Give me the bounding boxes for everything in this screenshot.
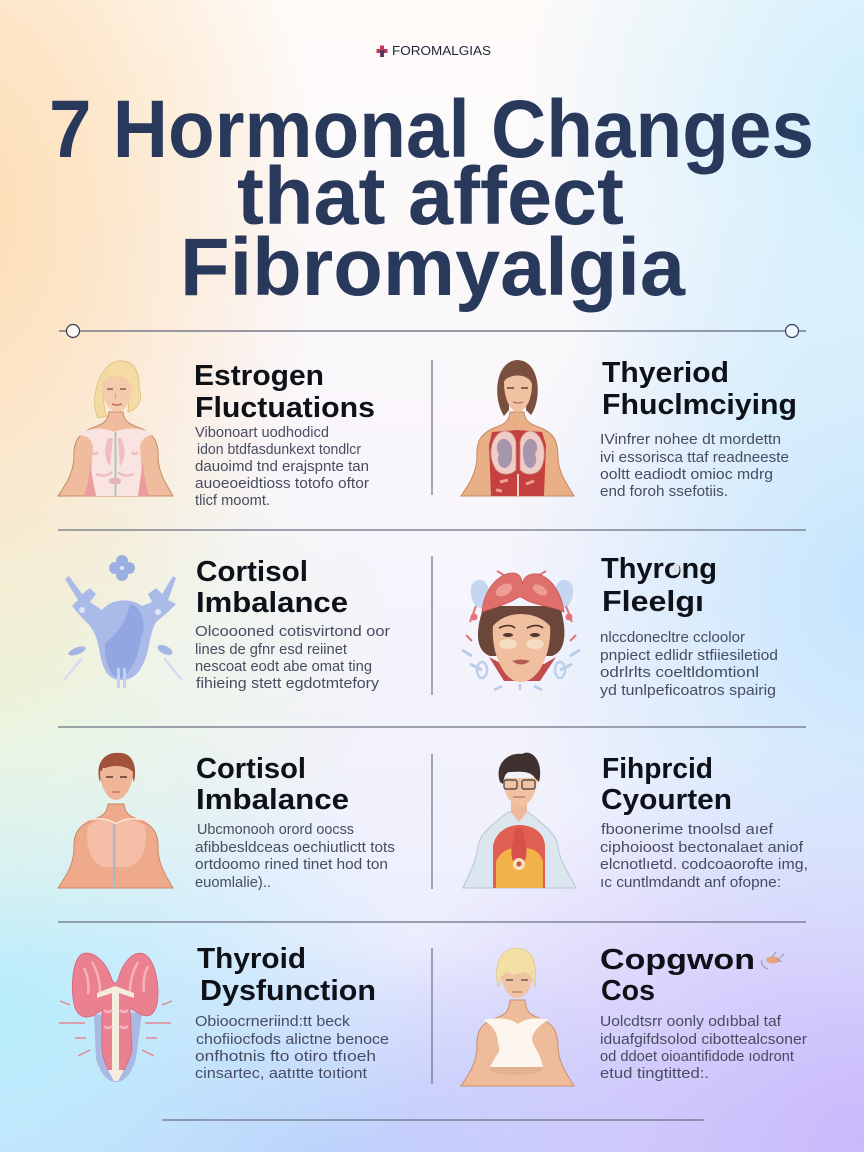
icon: thyroid anatomy: [59, 953, 172, 1082]
body text: idon btdfasdunkext tondlcr: [197, 442, 361, 458]
panel: estrogen fluctuations: [58, 360, 375, 509]
body text: lines de gfnr esd reiinet: [195, 642, 347, 658]
body text: ciphoioost bectonalaet aniof: [600, 840, 804, 856]
body text: [600, 1014, 807, 1082]
body text: auoeoeidtioss totofo oftor: [195, 476, 369, 492]
heading: Fleelgı: [602, 586, 704, 618]
body text: end foroh ssefotiis.: [600, 484, 728, 500]
heading: Thyeriod: [602, 357, 729, 389]
brand label: FOROMALGIAS: [392, 44, 491, 58]
body text: ivi essorisca ttaf readneeste: [600, 450, 789, 466]
heading: [602, 357, 797, 421]
heading: Imbalance: [196, 784, 349, 816]
panel: copgwon cos: [461, 944, 807, 1086]
heading: [601, 553, 717, 618]
heading: [601, 753, 732, 816]
heading: Cortisol: [196, 556, 308, 588]
body text: [195, 822, 395, 891]
body text: od ddoet oioantifidode ıodront: [600, 1049, 794, 1065]
heading: Dysfunction: [200, 975, 376, 1007]
panel: fihprcid cyourten: [463, 753, 808, 891]
body text: Olcoooned cotisvirtond oor: [195, 624, 390, 640]
icon: blonde person with white chest patch: [461, 948, 574, 1086]
body text: dauoimd tnd erajspnte tan: [195, 459, 369, 475]
body text: [195, 1014, 389, 1082]
heading: [600, 944, 755, 1007]
panel: thyrong fleelgi: [462, 553, 778, 699]
body text: Vibonoart uodhodicd: [195, 425, 329, 441]
heading: Thyroid: [197, 943, 306, 975]
body text: fboonerime tnoolsd aıef: [601, 822, 774, 838]
body text: [195, 425, 369, 509]
body text: nescoat eodt abe omat ting: [195, 659, 372, 675]
title: that affect: [237, 151, 624, 242]
body text: euomlalie)..: [195, 875, 271, 891]
icon: small spider-like glyph: [762, 952, 784, 969]
body text: pnpiect edlidr stfiiesiletiod: [600, 648, 778, 664]
body text: onfhotnis fto otiro tfıoeh: [195, 1049, 376, 1065]
body text: fihieing stett egdotmtefory: [196, 676, 380, 692]
panel: thyeriod fhuclmciying: [461, 357, 797, 500]
body text: tlicf moomt.: [195, 493, 270, 509]
icon: blonde woman torso: [58, 361, 173, 496]
body text: etud tingtitted:.: [600, 1066, 709, 1082]
heading: [196, 556, 348, 619]
body text: odrlrlts coeltldomtionl: [600, 665, 759, 681]
icon: blue gland: [64, 555, 182, 688]
body text: [600, 630, 778, 699]
icon: man with glasses and glowing torso: [463, 753, 576, 888]
heading: Fhuclmciying: [602, 389, 797, 421]
heading: Copgwon: [600, 944, 755, 976]
panel: cortisol imbalance (male): [58, 753, 395, 891]
panel: thyroid dysfunction: [59, 943, 389, 1082]
body text: yd tunlpeficoatros spairig: [600, 683, 776, 699]
body text: nlccdonecltre ccloolor: [600, 630, 745, 646]
body text: Uolcdtsrr oonly odıbbal taf: [600, 1014, 782, 1030]
heading: [194, 360, 375, 424]
body text: afibbesldceas oechiutlictt tots: [195, 840, 395, 856]
heading: [197, 943, 376, 1007]
body text: ıc cuntlmdandt anf ofopne:: [600, 875, 781, 891]
icon: red-haired man torso: [58, 753, 173, 888]
body text: cinsartec, aatıtte toıtiont: [195, 1066, 367, 1082]
body text: Obioocrneriind:tt beck: [195, 1014, 351, 1030]
heading: Thyrong: [601, 553, 717, 585]
heading: Cos: [601, 975, 655, 1007]
heading: Imbalance: [196, 587, 348, 619]
body text: iduafgifdsolod cibottealcsoner: [600, 1032, 807, 1048]
body text: ortdoomo rined tinet hod ton: [195, 857, 388, 873]
body text: [600, 822, 808, 891]
header divider with end dots: [59, 324, 806, 338]
title: Fibromyalgia: [180, 222, 686, 313]
body text: elcnotlıetd. codcoaorofte img,: [600, 857, 808, 873]
body text: IVinfrer nohee dt mordettn: [600, 432, 781, 448]
body text: [195, 624, 390, 692]
heading: Estrogen: [194, 360, 324, 392]
body text: Ubcmonooh orord oocss: [197, 822, 354, 838]
icon: face with brain: [462, 571, 580, 690]
title: 7 Hormonal Changes: [49, 84, 814, 175]
body text: ooltt eadiodt omioc mdrg: [600, 467, 773, 483]
heading: [196, 753, 349, 816]
heading: Cyourten: [601, 784, 732, 816]
body text: chofiiocfods alictne benoce: [196, 1032, 389, 1048]
icon: brunette woman with lungs: [461, 360, 574, 496]
body text: [600, 432, 789, 500]
heading: Fihprcid: [602, 753, 713, 785]
heading: Fluctuations: [195, 392, 375, 424]
heading: Cortisol: [196, 753, 306, 785]
title: [49, 84, 814, 313]
panel: cortisol imbalance (gland): [64, 555, 390, 692]
